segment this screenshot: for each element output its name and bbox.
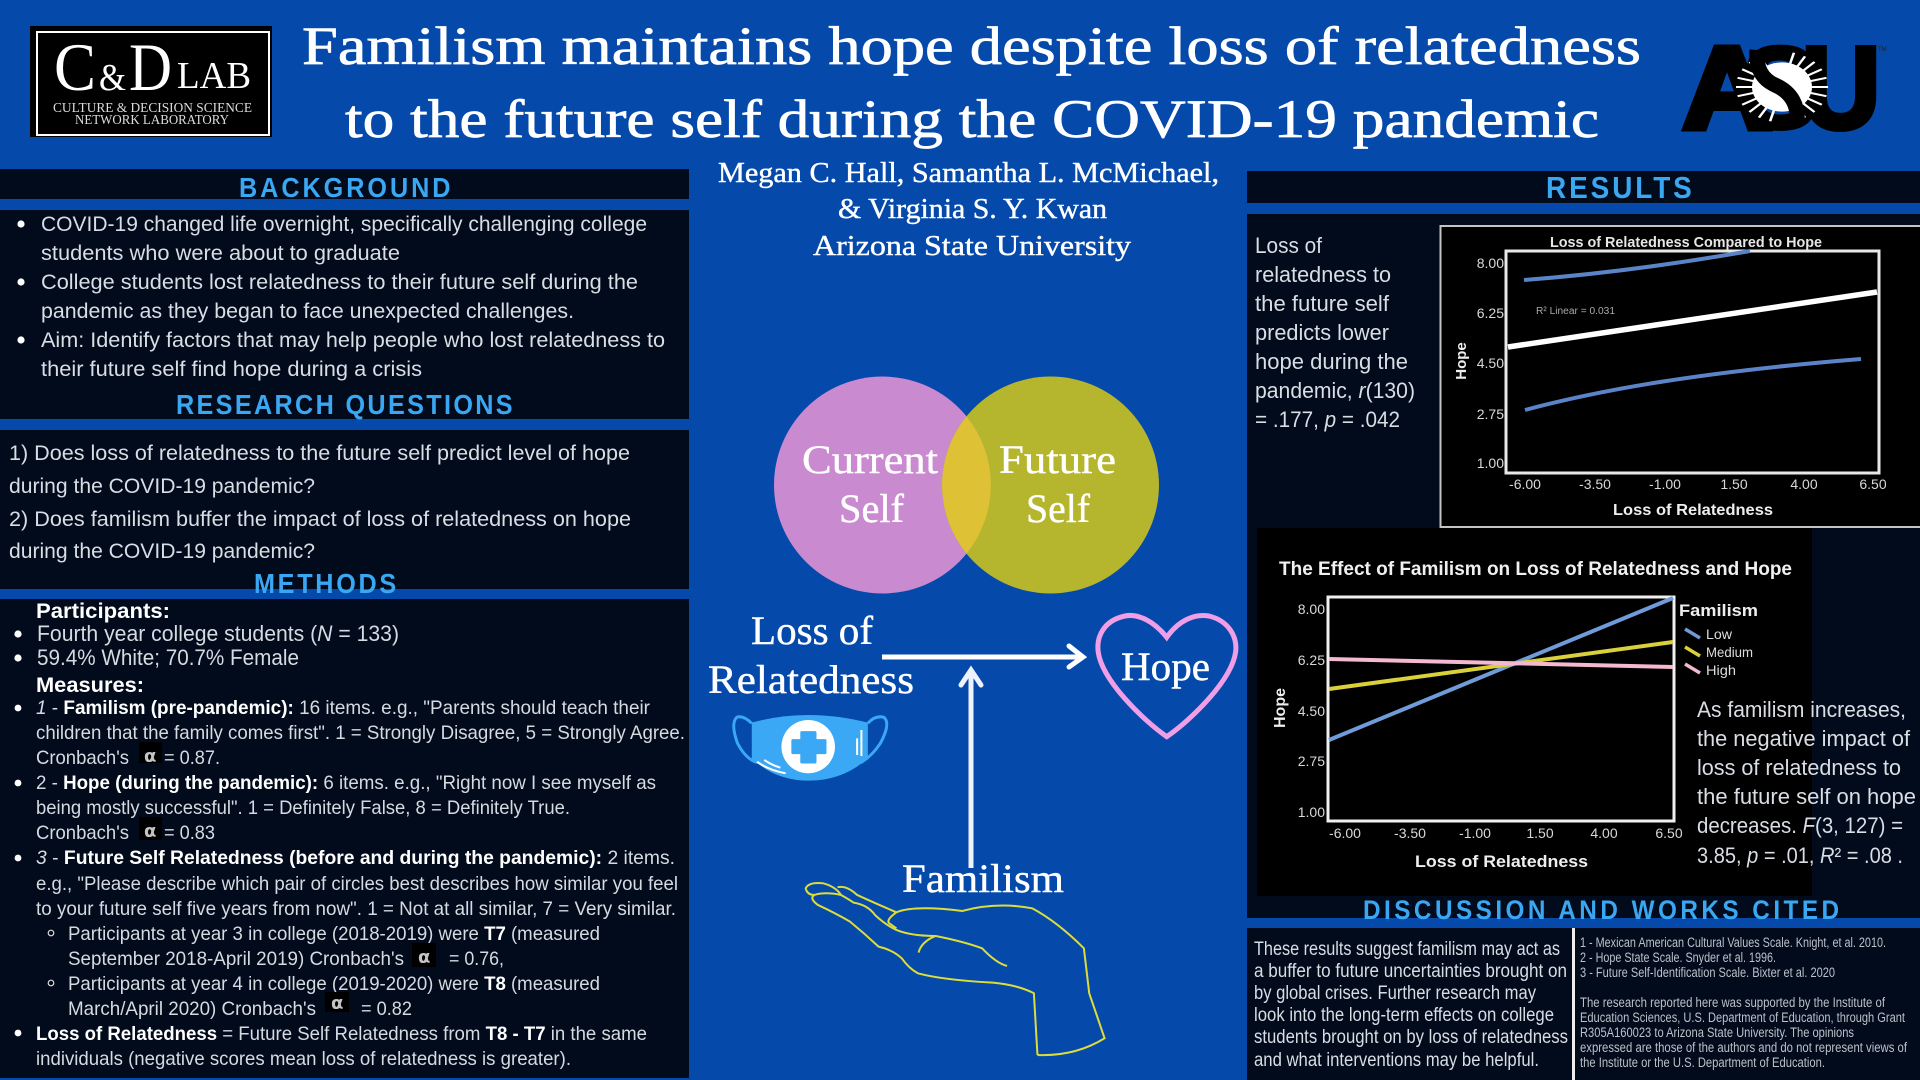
text: moderation result: the future self on hope (1697, 784, 1916, 809)
text: measures: = 0.76, (449, 948, 504, 970)
text: moderation result: As familism increases, (1697, 697, 1906, 722)
chart: effect of familism on loss of relatedness and hope: Hope (1272, 688, 1289, 728)
logo: ASU: U (1802, 23, 1880, 153)
text: correlation result: the future self (1255, 291, 1390, 316)
legend: familism (1679, 601, 1758, 678)
text: authors: Arizona State University (813, 231, 1131, 262)
label: future self (999, 437, 1116, 531)
heading: discussion and works cited: DISCUSSION AND WORKS CITED (1363, 896, 1839, 925)
chart: loss of relatedness compared to hope: -3.50 (1579, 476, 1611, 492)
text: measures: individuals (negative scores mean loss of relatedness is greater). (36, 1048, 571, 1070)
logo: C&D Lab: D (129, 29, 172, 105)
logo: C&D Lab: NETWORK LABORATORY (75, 113, 229, 128)
logo: C&D Lab: CULTURE & DECISION SCIENCE (53, 101, 252, 116)
chart: effect of familism on loss of relatedness and hope: 6.25 (1298, 652, 1325, 668)
text: measures: α (331, 993, 343, 1014)
text: works cited and funding: 3 - Future Self-Identification Scale. Bixter et al. 2020 (1580, 965, 1835, 980)
text: background bullets: students who were about to graduate (41, 242, 400, 265)
panel: discussion and works cited (1247, 896, 1920, 1080)
chart: effect of familism on loss of relatedness and hope: -6.00 (1329, 825, 1361, 841)
text: measures: = 0.87. (164, 747, 220, 769)
text: measures: α (144, 821, 156, 842)
label: future self: Future (999, 437, 1116, 482)
chart: loss of relatedness compared to hope: 4.50 (1477, 355, 1504, 371)
text: moderation result (1697, 697, 1916, 868)
chart: effect of familism on loss of relatedness and hope: -1.00 (1459, 825, 1491, 841)
text: measures: 1 - Familism (pre-pandemic): 16 items. e.g., "Parents should teach their (36, 697, 650, 719)
arrow: familism moderates relationship (961, 670, 981, 868)
logo: ASU: TM (1878, 47, 1887, 53)
title: to the future self during the COVID-19 pandemic (345, 89, 1599, 149)
text: authors (718, 158, 1219, 262)
text: discussion: These results suggest familism may act as (1254, 939, 1560, 960)
text: measures: 2 - Hope (during the pandemic): 6 items. e.g., "Right now I see myself as (36, 772, 656, 794)
text: measures: September 2018-April 2019) Cronbach's (68, 948, 404, 970)
text: measures: being mostly successful". 1 = Definitely False, 8 = Definitely True. (36, 797, 570, 819)
text: correlation result (1255, 233, 1415, 432)
panel: background (0, 169, 689, 419)
icon: medical mask (734, 715, 887, 781)
chart: effect of familism on loss of relatedness and hope: Loss of Relatedness (1415, 852, 1588, 871)
text: correlation result: hope during the (1255, 349, 1408, 374)
text: measures: = 0.82 (361, 998, 412, 1020)
text: discussion: and what interventions may be helpful. (1254, 1050, 1539, 1071)
text: discussion (1254, 939, 1568, 1071)
text: discussion: by global crises. Further research may (1254, 983, 1536, 1004)
text: works cited and funding: R305A160023 to Arizona State University. The opinions (1580, 1025, 1854, 1040)
chart: loss of relatedness compared to hope: 6.25 (1477, 305, 1504, 321)
label: familism: Familism (902, 856, 1064, 901)
text: research questions (9, 442, 631, 563)
chart: loss of relatedness compared to hope: 1.00 (1477, 455, 1504, 471)
text: measures: Cronbach's (36, 822, 129, 844)
chart: loss of relatedness compared to hope: 4.00 (1790, 476, 1818, 492)
text: authors: Megan C. Hall, Samantha L. McMichael, (718, 158, 1219, 189)
label: loss of relatedness: Relatedness (708, 657, 914, 702)
chart: effect of familism on loss of relatedness and hope: 2.75 (1298, 753, 1325, 769)
chart: loss of relatedness compared to hope: -6.00 (1509, 476, 1541, 492)
text: works cited and funding: the Institute or the U.S. Department of Education. (1580, 1055, 1825, 1070)
chart: effect of familism on loss of relatedness and hope: 6.50 (1655, 825, 1683, 841)
logo: ASU: A (1683, 23, 1771, 153)
panel: research questions (0, 389, 689, 589)
text: moderation result: loss of relatedness to (1697, 755, 1901, 780)
text: measures (15, 674, 685, 1070)
text: measures: α (144, 746, 156, 767)
chart: effect of familism on loss of relatedness and hope: 1.00 (1298, 804, 1325, 820)
chart: effect of familism on loss of relatedness and hope: 4.00 (1590, 825, 1618, 841)
chart: loss of relatedness compared to hope (1440, 226, 1920, 527)
logo: ASU: S (1742, 23, 1818, 153)
text: research questions: during the COVID-19 pandemic? (9, 540, 315, 563)
text: measures: 3 - Future Self Relatedness (before and during the pandemic): 2 items. (36, 847, 675, 869)
text: correlation result: pandemic, r(130) (1255, 378, 1415, 403)
legend: familism: Medium (1706, 644, 1753, 660)
logo: ASU (1683, 23, 1887, 153)
heading: results: RESULTS (1546, 171, 1692, 205)
text: correlation result: Loss of (1255, 233, 1323, 258)
chart: loss of relatedness compared to hope: 6.50 (1859, 476, 1887, 492)
text: participants: Participants: (36, 600, 170, 623)
text: measures: March/April 2020) Cronbach's (68, 998, 316, 1020)
text: discussion: look into the long-term effects on college (1254, 1005, 1554, 1026)
chart: loss of relatedness compared to hope: -1.00 (1649, 476, 1681, 492)
logo: C&D Lab: LAB (177, 55, 251, 97)
logo: C&D Lab: & (99, 57, 126, 99)
chart: loss of relatedness compared to hope: 1.50 (1720, 476, 1748, 492)
text: moderation result: decreases. F(3, 127) = (1697, 813, 1903, 838)
title (302, 16, 1641, 149)
chart: effect of familism on loss of relatedness and hope: -3.50 (1394, 825, 1426, 841)
text: background bullets: Aim: Identify factors that may help people who lost relatedness to (41, 329, 665, 352)
legend: familism: Low (1706, 626, 1733, 642)
text: background bullets: College students lost relatedness to their future self during the (41, 271, 638, 294)
label: future self: Self (1026, 486, 1091, 531)
text: participants: Fourth year college students (N = 133) (37, 621, 399, 646)
text: measures: Cronbach's (36, 747, 129, 769)
text: measures: Measures: (36, 674, 144, 697)
text: background bullets: COVID-19 changed life overnight, specifically challenging college (41, 213, 647, 236)
label: current self: Current (802, 437, 938, 482)
chart: loss of relatedness compared to hope: Hope (1453, 342, 1470, 380)
heading: background: BACKGROUND (239, 172, 451, 203)
panel: methods (0, 568, 689, 1078)
heading: methods: METHODS (254, 568, 396, 599)
chart: effect of familism on loss of relatedness and hope (1257, 528, 1812, 896)
text: measures: Participants at year 4 in college (2019-2020) were T8 (measured (68, 973, 600, 995)
legend: familism: High (1706, 662, 1736, 678)
label: loss of relatedness: Loss of (751, 608, 874, 653)
text: discussion: students brought on by loss of relatedness (1254, 1027, 1568, 1048)
chart: effect of familism on loss of relatedness and hope: 8.00 (1298, 601, 1325, 617)
text: measures: e.g., "Please describe which pair of circles best describes how similar you feel (36, 873, 678, 895)
label: current self (802, 437, 938, 531)
chart: loss of relatedness compared to hope: Loss of Relatedness Compared to Hope (1550, 234, 1822, 251)
text: measures: to your future self five years from now". 1 = Not at all similar, 7 = Very similar. (36, 898, 676, 920)
logo: C&D Lab (30, 26, 272, 137)
text: works cited and funding: 2 - Hope State Scale. Snyder et al. 1996. (1580, 950, 1776, 965)
chart: loss of relatedness compared to hope: 8.00 (1477, 255, 1504, 271)
text: research questions: 1) Does loss of relatedness to the future self predict level of hope (9, 442, 630, 465)
chart: effect of familism on loss of relatedness and hope: 4.50 (1298, 703, 1325, 719)
text: moderation result: the negative impact of (1697, 726, 1911, 751)
text: measures: = 0.83 (164, 822, 215, 844)
logo: C&D Lab: C (54, 29, 96, 105)
heading: research questions: RESEARCH QUESTIONS (176, 389, 513, 420)
text: background bullets: their future self find hope during a crisis (41, 358, 422, 381)
text: measures: Loss of Relatedness = Future Self Relatedness from T8 - T7 in the same (36, 1023, 647, 1045)
text: measures: α (418, 947, 430, 968)
chart: loss of relatedness compared to hope: 2.75 (1477, 406, 1504, 422)
text: research questions: 2) Does familism buffer the impact of loss of relatedness on hope (9, 508, 631, 531)
venn diagram: current self and future self (774, 376, 1159, 594)
text: correlation result: = .177, p = .042 (1255, 407, 1400, 432)
chart: effect of familism on loss of relatedness and hope: 1.50 (1526, 825, 1554, 841)
icon: open hand (806, 883, 1105, 1055)
text: authors: & Virginia S. Y. Kwan (838, 194, 1107, 225)
icon: heart with hope (1098, 615, 1236, 737)
text: background bullets: pandemic as they began to face unexpected challenges. (41, 300, 574, 323)
label: loss of relatedness (708, 608, 914, 702)
text: research questions: during the COVID-19 pandemic? (9, 475, 315, 498)
text: moderation result: 3.85, p = .01, R² = .08 . (1697, 843, 1903, 868)
chart: effect of familism on loss of relatedness and hope: The Effect of Familism on Loss of Relatedness and Hope (1279, 559, 1792, 580)
text: discussion: a buffer to future uncertainties brought on (1254, 961, 1567, 982)
label: current self: Self (839, 486, 905, 531)
text: participants (14, 600, 399, 670)
text: background bullets (17, 213, 665, 381)
chart: loss of relatedness compared to hope: R² Linear = 0.031 (1536, 306, 1615, 317)
text: correlation result: relatedness to (1255, 262, 1391, 287)
text: participants: 59.4% White; 70.7% Female (37, 645, 299, 670)
text: measures: Participants at year 3 in college (2018-2019) were T7 (measured (68, 923, 600, 945)
panel: results (1247, 171, 1920, 918)
legend: familism: Familism (1679, 601, 1758, 620)
arrow: loss of relatedness to hope (882, 646, 1083, 667)
chart: loss of relatedness compared to hope: Loss of Relatedness (1613, 502, 1773, 519)
icon: heart with hope: Hope (1121, 644, 1210, 689)
text: correlation result: predicts lower (1255, 320, 1389, 345)
text: works cited and funding (1580, 935, 1907, 1070)
title: Familism maintains hope despite loss of relatedness (302, 16, 1641, 76)
text: measures: children that the family comes first". 1 = Strongly Disagree, 5 = Strongly Agree. (36, 722, 685, 744)
